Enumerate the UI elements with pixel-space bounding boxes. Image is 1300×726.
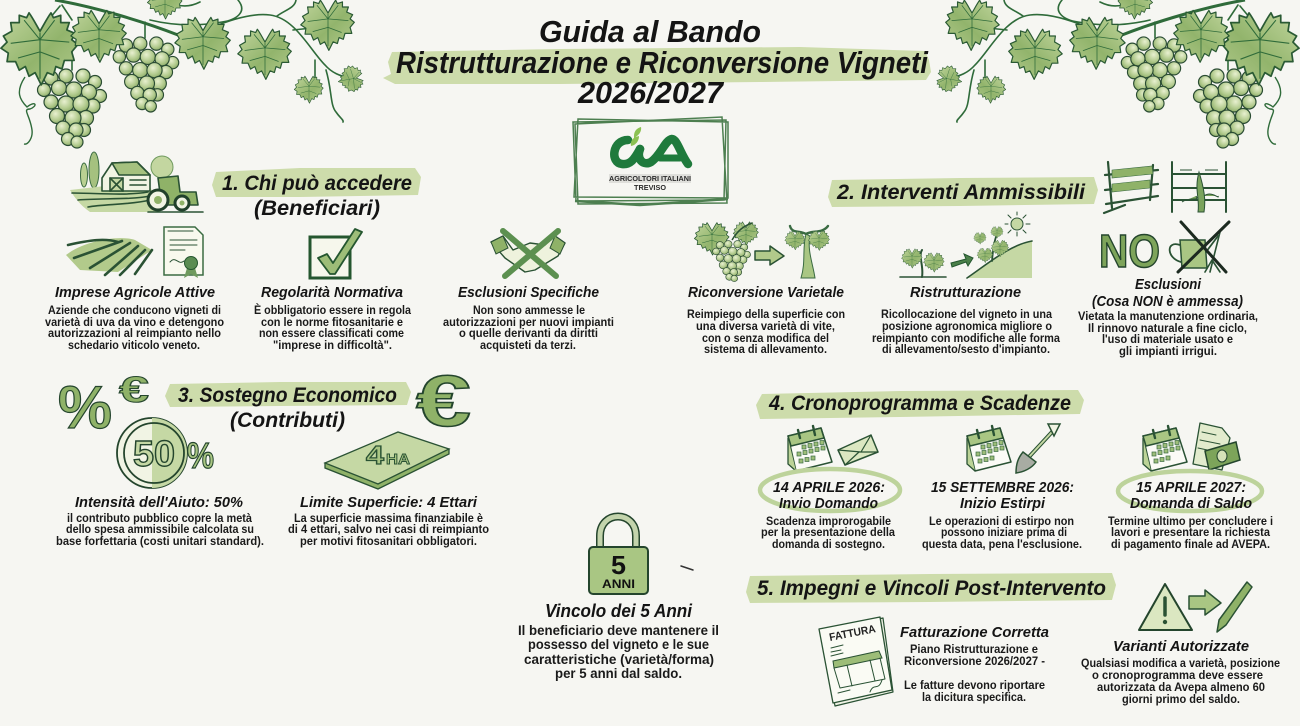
item text: Scadenza improrogabile <box>766 514 891 528</box>
panel: Vincolo dei 5 Anni <box>518 516 719 681</box>
section heading: 3. Sostegno Economico <box>178 384 397 407</box>
item text: Non sono ammesse le <box>473 303 585 317</box>
item text: "imprese in difficoltà". <box>273 338 392 352</box>
item text <box>904 642 1045 704</box>
logo: CIA Agricoltori Italiani Treviso <box>573 117 728 205</box>
item text: dello spesa ammissibile calcolata su <box>66 522 254 536</box>
heading highlight <box>756 390 1084 419</box>
item text: base forfettaria (costi unitari standard). <box>56 534 264 548</box>
item text: possono iniziare prima di <box>941 525 1067 539</box>
section heading: 2. Interventi Ammissibili <box>836 181 1086 204</box>
item text: Reimpiego della superficie con <box>687 307 845 321</box>
heading highlight <box>746 573 1116 603</box>
icon: invoice <box>819 617 893 706</box>
icon: calendar and shovel <box>967 424 1060 473</box>
column: Esclusioni <box>1078 222 1258 358</box>
item title: Limite Superficie: 4 Ettari <box>300 494 478 511</box>
item text: Termine ultimo per concludere i <box>1108 514 1273 528</box>
heading highlight <box>165 382 411 407</box>
panel: 3. Sostegno Economico: (Contributi) <box>230 409 345 432</box>
icon: grapes to new vine <box>694 222 830 282</box>
date heading: 14 APRILE 2026: <box>773 479 885 496</box>
item text <box>1078 309 1258 358</box>
column: 15 aprile 2027: Domanda di Saldo <box>1130 495 1252 512</box>
item title: Esclusioni <box>1135 276 1202 293</box>
section heading: 1. Chi può accedere <box>222 172 412 195</box>
item title: Esclusioni Specifiche <box>458 284 599 301</box>
icon: percent sign: % <box>58 374 112 441</box>
item text: Qualsiasi modifica a varietà, posizione <box>1081 656 1280 670</box>
logo text <box>609 174 691 183</box>
item text: non essere classificati come <box>259 326 404 340</box>
date ring <box>760 469 900 511</box>
section heading: 5. Impegni e Vincoli Post-Intervento <box>757 577 1106 600</box>
title block <box>383 14 931 110</box>
date ring <box>1118 471 1262 511</box>
column: Ristrutturazione <box>872 212 1060 356</box>
item text <box>922 514 1082 551</box>
title line 3: 2026/2027 <box>577 75 725 110</box>
icon: invoice: FATTURA <box>828 623 877 644</box>
item text: sistema di allevamento. <box>704 342 827 356</box>
item text: È obbligatorio essere in regola <box>254 302 411 317</box>
title highlight <box>383 47 931 84</box>
icon: checkbox <box>310 229 362 278</box>
icon: calendar, document and money <box>1143 423 1240 471</box>
icon: 50% coin: % <box>187 435 214 476</box>
item text: Ricollocazione del vigneto in una <box>881 307 1052 321</box>
icon: crossed handshake <box>491 231 565 276</box>
item text: per 5 anni dal saldo. <box>555 665 682 681</box>
column: 15 aprile 2027 <box>1108 423 1273 551</box>
item text <box>1108 514 1273 551</box>
panel: 1. Chi può accedere: (Beneficiari) <box>254 197 380 220</box>
item text: acquisteti da terzi. <box>480 338 576 352</box>
icon: 4 hectare plot: HA <box>386 451 410 468</box>
item title: Riconversione Varietale <box>688 284 844 301</box>
item text: Le operazioni di estirpo non <box>929 514 1074 528</box>
item text: con le norme fitosanitarie e <box>261 315 403 329</box>
date heading: 15 SETTEMBRE 2026: <box>931 479 1074 496</box>
item title: Imprese Agricole Attive <box>55 284 215 301</box>
icon: large euro: € <box>416 362 471 442</box>
item text: di pagamento finale ad AVEPA. <box>1111 537 1270 551</box>
icon: small euro: € <box>119 369 149 410</box>
icon: padlock 5 anni: ANNI <box>602 577 635 591</box>
item text: il contributo pubblico copre la metà <box>67 511 252 525</box>
item text: caratteristiche (varietà/forma) <box>524 651 714 667</box>
vine decoration right <box>935 0 1299 148</box>
item text: posizione agronomica migliore o <box>882 319 1052 333</box>
item title: Vincolo dei 5 Anni <box>545 601 693 621</box>
item text: con o senza modifica del <box>702 331 829 345</box>
small pen mark <box>681 566 693 570</box>
icon: 50% coin: 50 <box>133 433 175 474</box>
item text: o cronoprogramma deve essere <box>1092 668 1263 682</box>
CIA mark <box>614 139 688 164</box>
item text <box>56 511 264 548</box>
item text <box>687 307 845 356</box>
item text: possesso del vigneto e le sue <box>528 636 709 652</box>
column: 14 aprile 2026: Invio Domando <box>779 495 878 512</box>
column: Fatturazione Corretta <box>819 617 1049 706</box>
logo: CIA Agricoltori Italiani Treviso: TREVISO <box>634 183 666 192</box>
column: Regolarità Normativa <box>254 229 411 352</box>
item title: Fatturazione Corretta <box>900 624 1049 641</box>
item text: l'uso di materiale usato e <box>1102 332 1233 346</box>
item text: autorizzazioni al reimpianto nello <box>48 326 221 340</box>
item text: la dicitura specifica. <box>922 690 1026 704</box>
item text: Aziende che conducono vigneti di <box>48 303 221 317</box>
column: Limite Superficie <box>288 432 489 548</box>
panel: 4. Cronoprogramma e Scadenze <box>756 390 1273 551</box>
item text: Le fatture devono riportare <box>904 678 1045 692</box>
item text: o quelle derivanti da diritti <box>459 326 598 340</box>
icon: padlock 5 anni <box>589 516 648 594</box>
item title: Ristrutturazione <box>910 284 1021 301</box>
item text: domanda di sostegno. <box>772 537 885 551</box>
icon: farm and tractor <box>70 152 203 212</box>
item text: lavori e presentare la richiesta <box>1111 525 1270 539</box>
item text: autorizzata da Avepa almeno 60 <box>1097 680 1265 694</box>
panel: 5. Impegni e Vincoli Post-Intervento <box>746 573 1280 706</box>
item title: Regolarità Normativa <box>261 284 403 301</box>
column: Esclusioni: (Cosa NON è ammessa) <box>1092 293 1243 310</box>
item text <box>761 514 895 551</box>
icon: padlock 5 anni: 5 <box>611 550 626 580</box>
item text: giorni primo del saldo. <box>1122 692 1240 706</box>
panel: 1. Chi può accedere <box>45 152 614 352</box>
title line 1: Guida al Bando <box>539 14 761 49</box>
logo: CIA Agricoltori Italiani Treviso: AGRICOLTORI ITALIANI <box>609 174 691 183</box>
icon: warning, arrow and pen <box>1139 582 1252 632</box>
section heading: 4. Cronoprogramma e Scadenze <box>768 392 1071 415</box>
item title: Intensità dell'Aiuto: 50% <box>75 494 243 511</box>
icon: 4 hectare plot <box>325 432 449 489</box>
item text: autorizzazioni per nuovi impianti <box>443 315 614 329</box>
column: Intensità dell'Aiuto <box>56 418 264 548</box>
column: 14 aprile 2026 <box>760 426 900 551</box>
item text: reimpianto con modifiche alle forma <box>872 331 1060 345</box>
item text: di 4 ettari, salvo nei casi di reimpianto <box>288 522 489 536</box>
item text: di allevamento/sesto d'impianto. <box>882 342 1050 356</box>
column: Riconversione Varietale <box>687 222 845 356</box>
item text: La superficie massima finanziabile è <box>294 511 483 525</box>
column: 15 settembre 2026 <box>922 424 1082 551</box>
item text: gli impianti irrigui. <box>1119 344 1217 358</box>
vine decoration left <box>1 0 365 148</box>
icon: vineyard <box>66 238 152 275</box>
icon: certificate <box>164 227 203 278</box>
icon: 4 hectare plot: 4 <box>366 440 385 470</box>
item text <box>1081 656 1280 706</box>
heading highlight <box>212 168 421 197</box>
icon: vine trellis <box>1104 162 1226 213</box>
item title: Varianti Autorizzate <box>1113 638 1249 655</box>
item text: per la presentazione della <box>761 525 895 539</box>
item text <box>518 622 719 681</box>
item text: schedario viticolo veneto. <box>68 338 200 352</box>
item text: Il beneficiario deve mantenere il <box>518 622 719 638</box>
title line 2: Ristrutturazione e Riconversione Vigneti <box>396 45 929 80</box>
column: 15 settembre 2026: Inizio Estirpi <box>960 495 1046 512</box>
column: Imprese Agricole Attive <box>45 227 224 352</box>
item text <box>443 303 614 352</box>
icon: NO with crossed tools: NO <box>1099 225 1160 277</box>
item text <box>288 511 489 548</box>
item text: Vietata la manutenzione ordinaria, <box>1078 309 1258 323</box>
item text <box>254 302 411 352</box>
item text: per motivi fitosanitari obbligatori. <box>300 534 477 548</box>
icon: 50% coin <box>117 418 214 488</box>
column: Esclusioni Specifiche <box>443 231 614 352</box>
icon: NO with crossed tools <box>1099 222 1229 277</box>
icon: calendar and envelope <box>788 426 878 471</box>
date heading: 15 APRILE 2027: <box>1136 479 1246 496</box>
sketched frame <box>573 117 728 204</box>
panel: 2. Interventi Ammissibili <box>687 162 1258 358</box>
column: Varianti Autorizzate <box>1081 582 1280 706</box>
item text: varietà di uva da vino e detengono <box>45 315 224 329</box>
item text: una diversa varietà di vite, <box>696 319 835 333</box>
item text: questa data, pena l'esclusione. <box>922 537 1082 551</box>
item text: Piano Ristrutturazione e <box>910 642 1038 656</box>
item text: Il rinnovo naturale a fine ciclo, <box>1088 321 1247 335</box>
item text: Riconversione 2026/2027 - <box>904 654 1045 668</box>
icon: replanting on a sunny hill <box>900 212 1032 278</box>
item text <box>872 307 1060 356</box>
panel: 3. Sostegno Economico <box>56 362 489 548</box>
heading highlight <box>828 177 1098 207</box>
item text <box>45 303 224 352</box>
